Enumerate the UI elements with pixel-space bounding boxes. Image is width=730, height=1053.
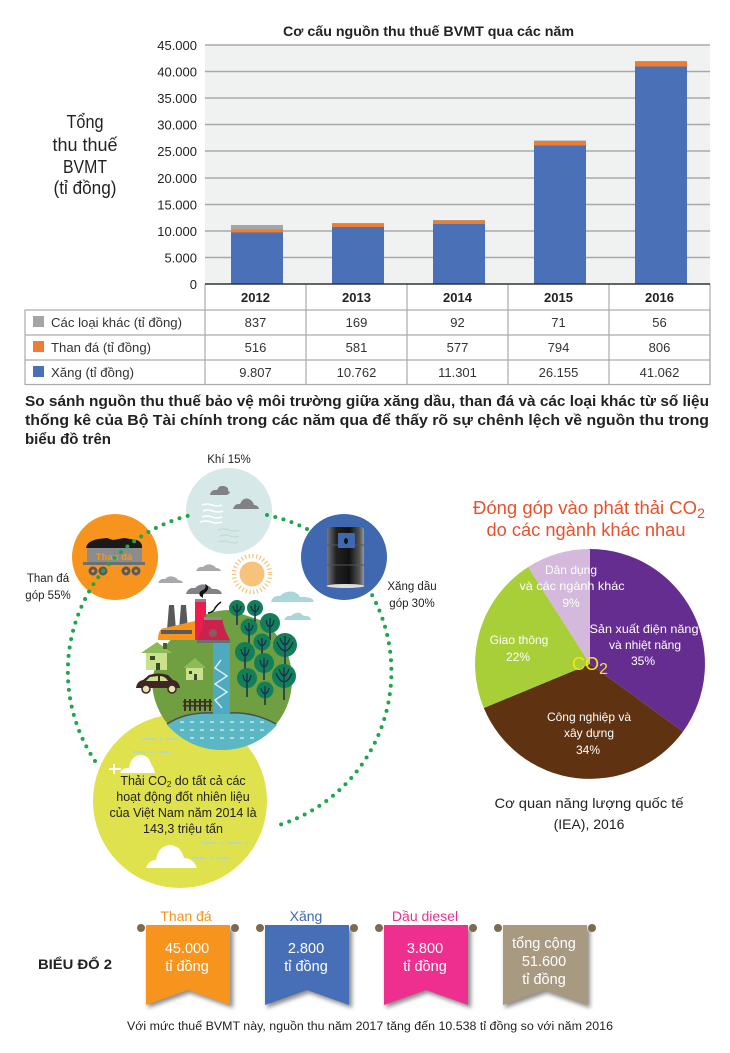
slice: industry and construction [484, 664, 683, 779]
icon: trees [229, 600, 297, 705]
label: coal share: góp 55% [25, 590, 71, 602]
slice: power and heat [590, 549, 705, 732]
icon: coal wagon circle: Than đá [96, 552, 133, 563]
label: CO2 centre: CO [572, 654, 599, 674]
footer note: Với mức thuế BVMT này, nguồn thu năm 2017 tăng đến 10.538 tỉ đồng so với năm 2016 [127, 1021, 613, 1033]
title: chart heading: Cơ cấu nguồn thu thuế BVMT qua các năm [283, 23, 574, 39]
pie labels: Sản xuất điện năng [590, 622, 698, 636]
slice: residential and others [528, 549, 590, 664]
text: CO2 info [109, 774, 257, 836]
data table [25, 284, 710, 384]
source: IEA: Cơ quan năng lượng quốc tế [494, 795, 684, 811]
heading: CO2 sectors: 2 [697, 505, 705, 521]
banner: total: tổng cộng [512, 936, 576, 952]
pie labels: 34% [576, 743, 600, 757]
banner: diesel: Dầu diesel [392, 908, 458, 924]
banner: petrol [256, 908, 358, 1008]
row: coal: 806 [649, 340, 670, 355]
icon: car [136, 674, 180, 693]
text: CO2 info: hoạt động đốt nhiên liệu [116, 790, 250, 804]
y axis labels: 20.000 [157, 171, 197, 186]
banner: total [494, 924, 596, 1008]
banner: petrol: Xăng [290, 908, 322, 924]
text: CO2 info: 2 [167, 780, 172, 789]
pie labels: Công nghiệp và [547, 710, 631, 724]
y axis labels: 15.000 [157, 198, 197, 212]
text block: description [25, 394, 709, 448]
banner: petrol: 2.800 [288, 941, 324, 957]
y axis labels: 35.000 [157, 91, 197, 106]
bar 2016 [635, 61, 687, 284]
y axis labels: 0 [190, 277, 197, 292]
icon: fence [183, 699, 212, 711]
pie chart: CO2 by sector [475, 549, 705, 779]
pie labels: Dân dụng [545, 563, 597, 577]
heading: CO2 sectors: Đóng góp vào phát thải CO [473, 498, 691, 518]
y axis labels: 10.000 [157, 224, 197, 239]
source: IEA [494, 795, 684, 832]
banner: total: tỉ đồng [522, 972, 566, 988]
row: other types: 56 [652, 315, 667, 330]
pie labels: Giao thông [490, 633, 548, 647]
banner: coal: Than đá [160, 908, 212, 924]
text block: description: thống kê của Bộ Tài chính trong các năm qua để thấy rõ sự chênh lệch về nguồn thu trong [25, 413, 709, 429]
table header years [241, 290, 674, 305]
icon: sky clouds [158, 564, 314, 620]
icon: sun [234, 556, 270, 592]
banner: diesel [375, 908, 477, 1008]
text: CO2 info: do tất cả các [171, 774, 246, 788]
icon: factory [158, 584, 230, 643]
row: petrol: Xăng (tỉ đồng) [51, 365, 134, 380]
illustration: fuel emissions diagram [25, 454, 437, 888]
bar chart: revenue structure 2012-2016 [157, 38, 710, 292]
row: other types: 71 [551, 315, 566, 330]
icon: coal wagon circle [72, 514, 158, 600]
table header years: 2012 [241, 290, 270, 305]
row: petrol [33, 365, 679, 380]
y axis labels: 5.000 [164, 250, 197, 266]
pie labels: và nhiệt năng [609, 638, 681, 652]
pie labels: 35% [631, 654, 655, 668]
row: other types: 92 [450, 315, 465, 330]
row: coal [33, 340, 670, 355]
y axis labels: 25.000 [157, 144, 197, 159]
axis title: total tax revenue: (tỉ đồng) [54, 178, 116, 198]
banner: total: 51.600 [522, 954, 566, 970]
table header years: 2015 [544, 290, 573, 305]
pie labels [490, 563, 698, 757]
label: CO2 centre: 2 [599, 661, 608, 678]
pie labels: và các ngành khác [520, 579, 624, 593]
axis title: total tax revenue: Tổng [66, 112, 104, 132]
bar 2015 [534, 140, 586, 284]
row: other types [33, 315, 667, 330]
row: other types: 837 [245, 315, 266, 330]
source: IEA: (IEA), 2016 [554, 816, 625, 832]
table header years: 2014 [443, 290, 473, 305]
banner: coal: 45.000 [165, 941, 209, 957]
bar 2012 [231, 225, 283, 284]
banner: diesel: tỉ đồng [403, 959, 447, 975]
row: coal: 581 [346, 340, 367, 355]
row: petrol: 10.762 [337, 365, 376, 380]
row: petrol: 41.062 [640, 365, 679, 380]
circle: yellow CO2 info [93, 714, 267, 888]
text: CO2 info: của Việt Nam năm 2014 là [109, 806, 257, 820]
banner: petrol: tỉ đồng [284, 959, 328, 975]
table header years: 2013 [342, 290, 371, 305]
row: coal: 516 [245, 340, 266, 355]
banner: diesel: 3.800 [407, 941, 443, 957]
heading: CO2 sectors [473, 498, 705, 540]
y axis labels [157, 38, 197, 292]
axis title: total tax revenue [52, 112, 118, 198]
slice: transport [475, 567, 590, 708]
label: coal share [25, 573, 71, 602]
pie labels: 22% [506, 650, 530, 664]
row: coal: Than đá (tỉ đồng) [51, 340, 151, 355]
row: coal: 577 [447, 340, 468, 355]
row: petrol: 26.155 [539, 365, 578, 380]
text: CO2 info: 143,3 triệu tấn [143, 822, 223, 836]
row: coal: 794 [548, 340, 569, 355]
bar 2014 [433, 220, 485, 284]
banner: coal [137, 908, 239, 1008]
label: gas share: Khí 15% [207, 454, 251, 466]
label: coal share: Than đá [27, 573, 70, 585]
text block: description: So sánh nguồn thu thuế bảo vệ môi trường giữa xăng dầu, than đá và các loại khác từ số liệu [25, 394, 709, 410]
row: other types: 169 [346, 315, 367, 330]
label: petrol share: Xăng dầu [387, 581, 437, 593]
y axis labels: 40.000 [157, 64, 197, 80]
icon: oil barrel circle [301, 514, 387, 600]
icon: gas circle [186, 468, 272, 554]
row: petrol: 11.301 [438, 365, 477, 380]
text: CO2 info: Thải CO [120, 774, 167, 788]
axis title: total tax revenue: thu thuế [52, 135, 118, 155]
pie labels: xây dựng [564, 726, 614, 740]
label: petrol share: góp 30% [389, 598, 435, 610]
label: petrol share [387, 581, 437, 610]
text block: description: biểu đồ trên [25, 432, 111, 448]
heading: chart 2: BIỂU ĐỔ 2 [38, 955, 112, 972]
heading: CO2 sectors: do các ngành khác nhau [486, 520, 686, 540]
axis title: total tax revenue: BVMT [63, 157, 107, 177]
dotted ring [68, 515, 391, 826]
row: other types: Các loại khác (tỉ đồng) [51, 315, 182, 330]
y axis labels: 45.000 [157, 38, 197, 53]
illustration: globe landscape [136, 584, 297, 750]
y axis labels: 30.000 [157, 118, 197, 132]
bar 2013 [332, 223, 384, 284]
banner: coal: tỉ đồng [165, 959, 209, 975]
table header years: 2016 [645, 290, 674, 305]
row: petrol: 9.807 [239, 365, 272, 380]
pie labels: 9% [562, 596, 580, 610]
icon: houses [141, 642, 206, 680]
